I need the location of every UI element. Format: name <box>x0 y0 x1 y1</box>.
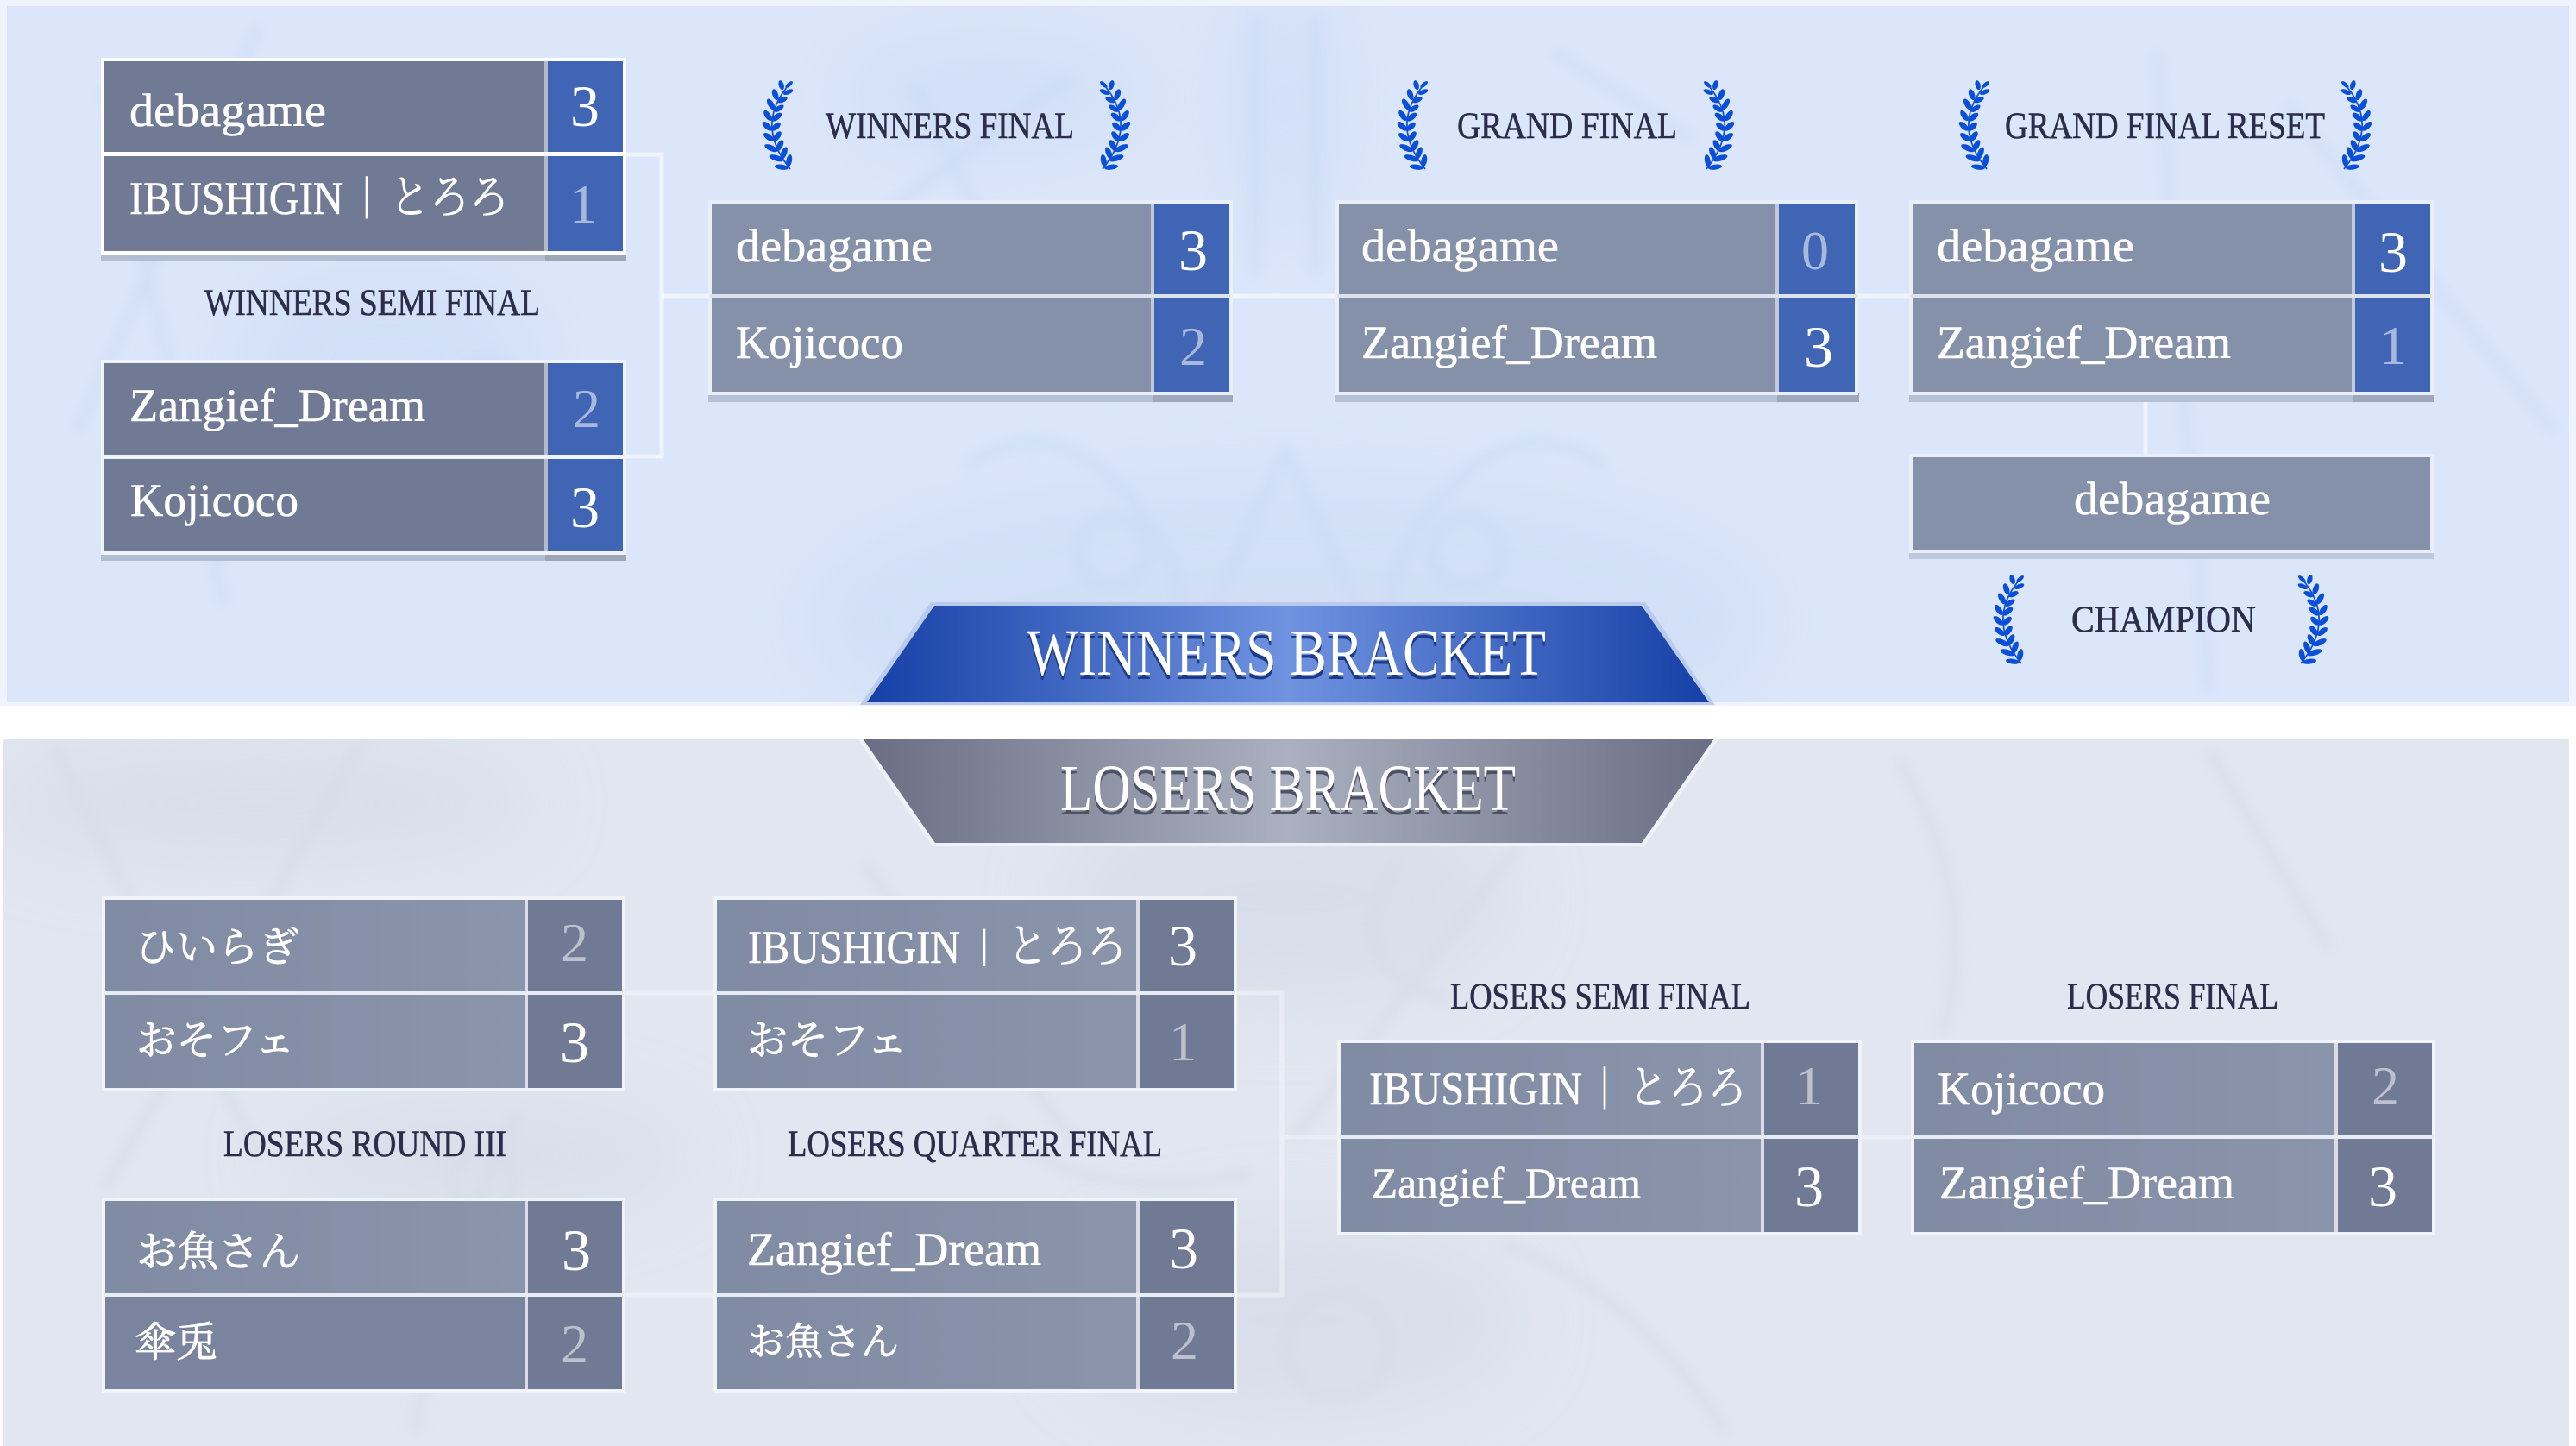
player: Zangief_Dream: Zangief_Dream <box>129 380 425 431</box>
score: 2: 2 <box>573 378 600 439</box>
player: IBUSHIGIN とろろ: IBUSHIGIN <box>748 921 960 973</box>
player: Zangief_Dream: Zangief_Dream <box>1372 1159 1641 1207</box>
icon: laurel left <box>1957 79 1990 171</box>
icon: laurel right <box>2340 79 2373 171</box>
score: 1: 1 <box>1169 1011 1197 1072</box>
banner: winners bracket <box>860 602 1715 705</box>
heading: grand final reset: GRAND FINAL RESET <box>2005 106 2325 147</box>
score: 3: 3 <box>2378 219 2408 285</box>
label: grand final with laurels <box>1396 79 1736 171</box>
player: Zangief_Dream: Zangief_Dream <box>1937 317 2231 368</box>
player: debagame: debagame <box>1937 220 2134 272</box>
score: 3: 3 <box>1178 217 1208 283</box>
player: IBUSHIGIN とろろ <box>748 921 1127 973</box>
player: おそフェ: おそフェ <box>747 1018 908 1064</box>
icon: laurel left <box>1396 79 1429 171</box>
player: Zangief_Dream: Zangief_Dream <box>1361 317 1657 368</box>
player: IBUSHIGIN とろろ: とろろ <box>1629 1062 1747 1114</box>
score: 2: 2 <box>561 1313 588 1374</box>
player: 傘兎: 傘兎 <box>135 1320 217 1366</box>
match: losers semi final <box>1339 1041 1860 1234</box>
panel: winners bracket background <box>0 0 2576 768</box>
player: IBUSHIGIN とろろ: とろろ <box>1008 921 1127 972</box>
score: 2: 2 <box>1179 316 1207 377</box>
heading: winners bracket: WINNERS BRACKET <box>1027 617 1546 689</box>
player: Kojicoco: Kojicoco <box>1938 1063 2105 1115</box>
panel: losers bracket background <box>0 739 2569 1446</box>
player: debagame: debagame <box>1361 220 1559 272</box>
match: losers round III top <box>104 898 624 1090</box>
label: grand final reset with laurels <box>1957 79 2373 171</box>
score: 1: 1 <box>569 173 597 235</box>
heading: losers bracket: LOSERS BRACKET <box>1060 752 1516 825</box>
player: お魚さん: お魚さん <box>747 1321 899 1363</box>
score: 3: 3 <box>570 475 600 540</box>
player: Kojicoco: Kojicoco <box>736 317 903 368</box>
player: Kojicoco: Kojicoco <box>130 475 298 526</box>
match: winners semi final bottom <box>101 362 626 561</box>
player: debagame: debagame <box>2074 473 2271 525</box>
score: 3: 3 <box>570 73 600 139</box>
player: IBUSHIGIN とろろ <box>1369 1058 1747 1115</box>
connectors: losers bracket <box>625 993 1911 1295</box>
match: winners semi final top <box>101 60 626 261</box>
score: 0: 0 <box>1801 220 1829 281</box>
icon: laurel right <box>1703 79 1736 171</box>
score: 2: 2 <box>561 912 588 973</box>
score: 3: 3 <box>1794 1154 1824 1219</box>
score: 1: 1 <box>1795 1055 1823 1116</box>
heading: winners final: WINNERS FINAL <box>826 106 1074 147</box>
player: debagame: debagame <box>129 85 326 136</box>
shadow text: LOSERS BRACKET <box>1060 757 1516 829</box>
player: IBUSHIGIN とろろ: | <box>362 167 371 219</box>
match: winners final <box>708 202 1233 402</box>
heading: champion: CHAMPION <box>2071 600 2256 640</box>
player: debagame: debagame <box>736 220 933 272</box>
label: losers round III: LOSERS ROUND III <box>223 1124 506 1165</box>
player: Zangief_Dream: Zangief_Dream <box>747 1223 1041 1275</box>
label: losers final: LOSERS FINAL <box>2067 977 2278 1017</box>
icon: laurel left <box>761 79 794 171</box>
player: IBUSHIGIN とろろ: IBUSHIGIN <box>129 173 343 224</box>
banner: losers bracket <box>858 739 1719 846</box>
match: losers final <box>1913 1041 2434 1234</box>
player: IBUSHIGIN とろろ <box>129 167 509 224</box>
shadow text: WINNERS BRACKET <box>1027 621 1546 694</box>
player: おそフェ: おそフェ <box>136 1018 295 1064</box>
player: ひいらぎ: ひいらぎ <box>135 925 299 971</box>
player: IBUSHIGIN とろろ: IBUSHIGIN <box>1369 1063 1582 1115</box>
heading: grand final: GRAND FINAL <box>1457 106 1677 147</box>
label: winners semi final: WINNERS SEMI FINAL <box>204 283 540 324</box>
score: 3: 3 <box>1168 913 1197 978</box>
match: losers round III bottom <box>104 1199 624 1391</box>
champion box <box>1909 456 2434 559</box>
label: champion with laurels <box>1992 574 2330 665</box>
score: 3: 3 <box>562 1217 591 1283</box>
match: grand final <box>1335 202 1859 402</box>
match: losers quarter final bottom <box>715 1199 1235 1391</box>
player: IBUSHIGIN とろろ: | <box>1600 1058 1609 1110</box>
icon: laurel right <box>1099 79 1132 171</box>
score: 3: 3 <box>2368 1154 2397 1219</box>
score: 3: 3 <box>560 1009 589 1075</box>
label: winners final with laurels <box>761 79 1132 171</box>
score: 3: 3 <box>1169 1216 1198 1281</box>
score: 2: 2 <box>1171 1310 1198 1371</box>
score: 2: 2 <box>2372 1055 2399 1116</box>
player: IBUSHIGIN とろろ: とろろ <box>390 172 509 223</box>
score: 1: 1 <box>2379 315 2407 376</box>
label: losers quarter final: LOSERS QUARTER FINAL <box>788 1124 1162 1165</box>
connectors: winners bracket <box>625 154 2146 456</box>
score: 3: 3 <box>1804 314 1833 380</box>
player: IBUSHIGIN とろろ: | <box>980 921 989 967</box>
match: grand final reset <box>1909 202 2434 402</box>
label: losers semi final: LOSERS SEMI FINAL <box>1450 977 1750 1017</box>
player: お魚さん: お魚さん <box>136 1229 300 1275</box>
match: losers quarter final top <box>715 898 1235 1090</box>
player: Zangief_Dream: Zangief_Dream <box>1939 1157 2234 1209</box>
icon: laurel left <box>1992 574 2025 665</box>
icon: laurel right <box>2297 574 2330 665</box>
